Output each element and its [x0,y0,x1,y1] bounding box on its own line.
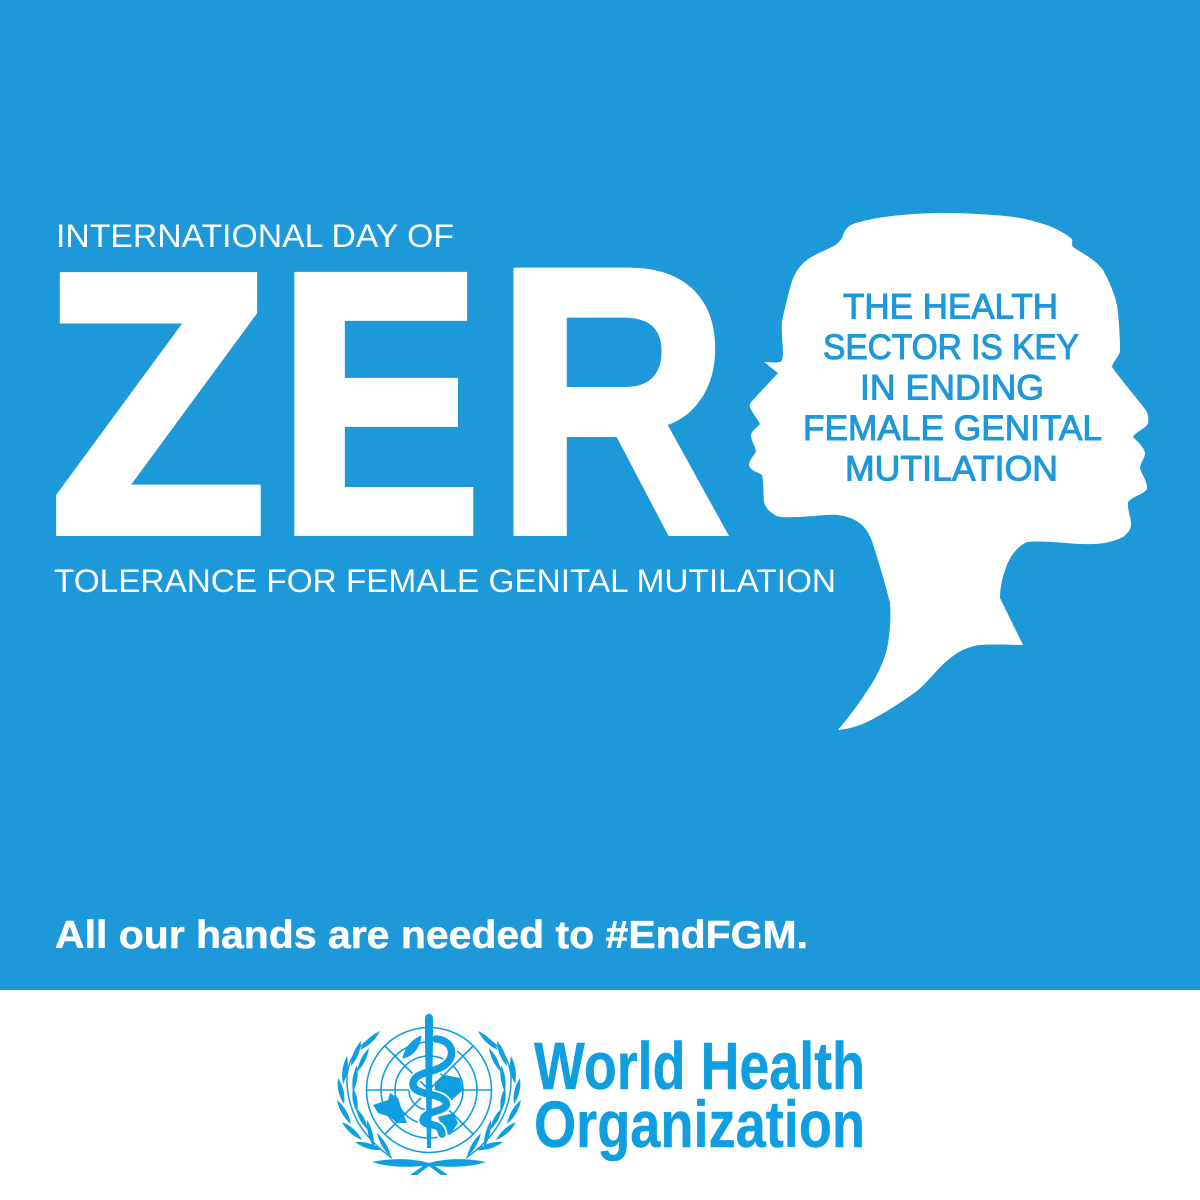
continents [373,1075,463,1135]
icon: WHO emblem [337,1014,521,1175]
icon: head silhouette with two faces [749,213,1148,730]
call to action: All our hands are needed to #EndFGM. [55,914,808,957]
text block: health sector message: MUTILATION [845,450,1058,488]
title: ZER: R [495,189,730,613]
text block: health sector message: FEMALE GENITAL [803,409,1102,448]
text block: health sector message: THE HEALTH [843,288,1058,326]
logo wordmark: World Health [534,1029,865,1104]
logo wordmark: Organization [534,1087,865,1161]
laurel branch right [466,1031,521,1158]
crossed stems [372,1159,486,1175]
logo wordmark [534,1029,865,1161]
serpent [403,1036,452,1134]
text block: health sector message: SECTOR IS KEY [823,328,1079,367]
panel: white footer [0,990,1200,1200]
title: ZER [42,189,730,622]
text block: health sector message [803,288,1102,488]
laurel branch left [337,1031,392,1158]
title: ZER: E [277,195,482,612]
subtitle: tolerance line: TOLERANCE FOR FEMALE GENITAL MUTILATION [54,563,836,599]
staff [425,1014,433,1148]
globe grid [366,1028,492,1152]
title: ZER: Z [42,200,275,622]
text block: health sector message: IN ENDING [860,368,1044,408]
heading: international day of: INTERNATIONAL DAY OF [56,218,454,254]
